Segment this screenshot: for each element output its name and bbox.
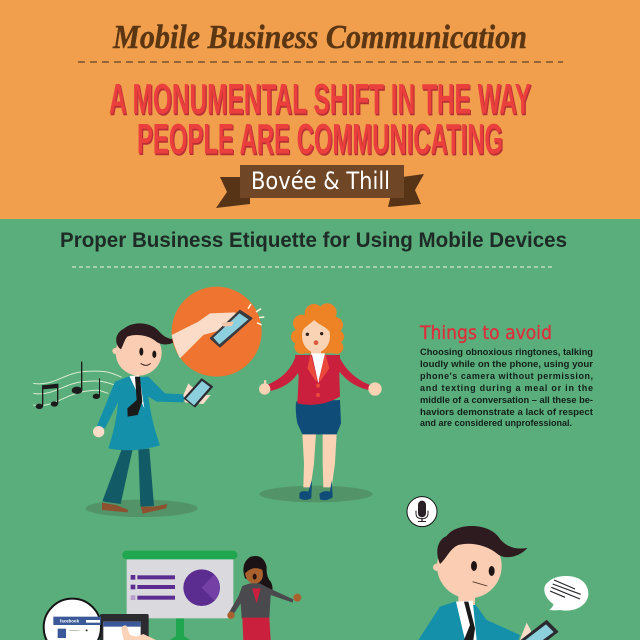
- illustration: man with ringing phone and music: [33, 323, 212, 517]
- body paragraph: loudly while on the phone, using your: [420, 359, 594, 369]
- text block: things to avoid: [419, 322, 594, 428]
- illustration: tablet with facebook magnifier: [44, 599, 156, 640]
- body paragraph: haviors demonstrate a lack of respect: [420, 407, 593, 417]
- title: Mobile Business Communication: [112, 19, 527, 56]
- illustration: orange circle with hand holding phone: [172, 287, 264, 377]
- illustration: surprised woman in red jacket: [259, 303, 382, 502]
- illustration: tablet with facebook magnifier: facebook: [60, 619, 80, 624]
- heading: monumental shift: [109, 76, 532, 165]
- illustration: presenter woman: [227, 556, 301, 640]
- ribbon banner with authors: Bovée & Thill: [251, 167, 390, 195]
- icon: speech bubble: [544, 576, 588, 611]
- heading: things to avoid: Things to avoid: [419, 322, 552, 344]
- body paragraph: phone's camera without permission,: [420, 371, 593, 381]
- body paragraph: middle of a conversation – all these be-: [420, 395, 593, 405]
- panel: orange header background: [0, 0, 640, 219]
- body paragraph: [420, 347, 594, 428]
- illustration: man reading phone: [418, 526, 558, 640]
- body paragraph: and are considered unprofessional.: [420, 418, 572, 428]
- body paragraph: Choosing obnoxious ringtones, talking: [420, 347, 593, 357]
- icon: microphone: [407, 497, 437, 527]
- body paragraph: and texting during a meal or in the: [420, 383, 593, 393]
- panel: green section background: [0, 219, 640, 640]
- illustration: presentation board: [122, 551, 237, 640]
- section heading: Proper Business Etiquette for Using Mobile Devices: [60, 229, 567, 252]
- ribbon banner with authors: [216, 165, 424, 208]
